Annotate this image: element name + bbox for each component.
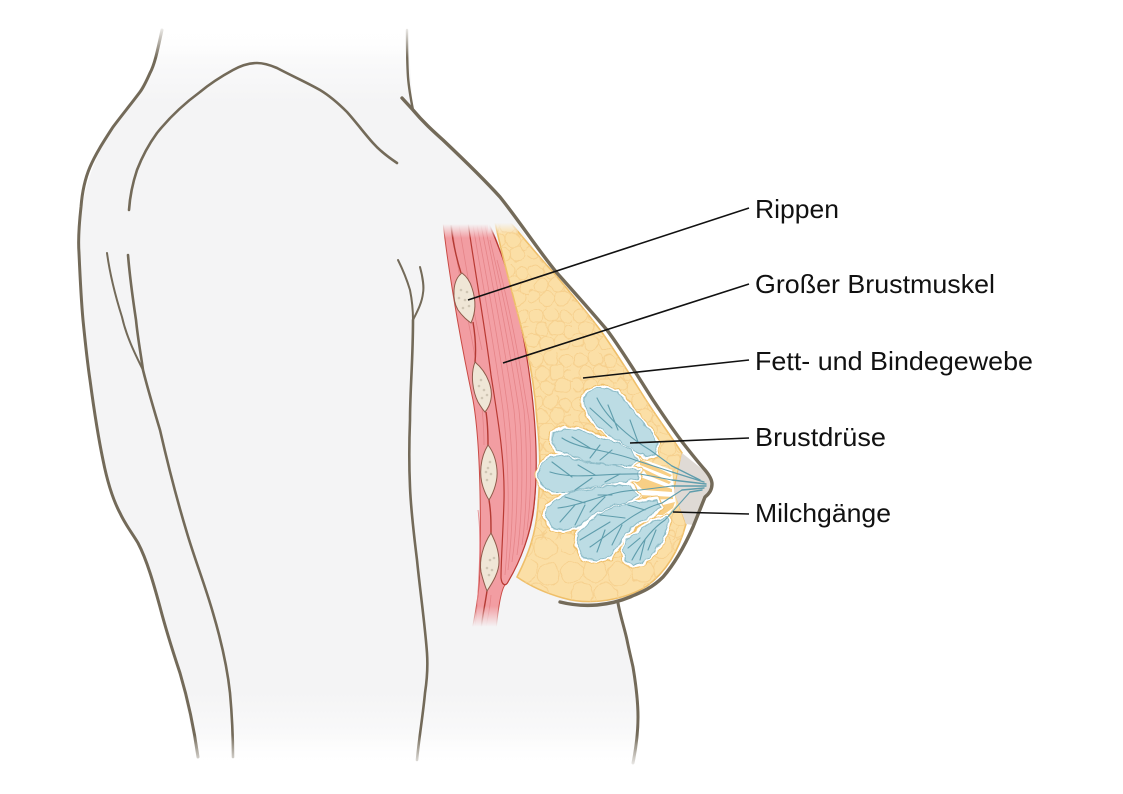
inner arm outline	[128, 255, 233, 757]
top fade	[60, 24, 480, 58]
pectoralis major muscle	[468, 222, 536, 585]
abdomen outline	[618, 603, 638, 763]
mammary gland lobes	[538, 387, 706, 565]
torso front line	[409, 320, 427, 760]
chest wall: ribs and muscles	[438, 218, 536, 632]
neck line	[407, 30, 413, 110]
rib 4	[480, 533, 499, 591]
shoulder curve	[129, 63, 397, 210]
armpit fold back	[413, 267, 423, 320]
white gap between ducts	[632, 455, 676, 525]
label: Brustdrüse: Brustdrüse	[755, 422, 886, 452]
bottom fade	[150, 735, 670, 770]
label: Großer Brustmuskel: Großer Brustmuskel	[755, 269, 995, 299]
chest and breast outline	[402, 98, 712, 605]
label: Fett- und Bindegewebe: Fett- und Bindegewebe	[755, 346, 1033, 376]
duct branches	[550, 398, 690, 560]
rib 2	[472, 362, 491, 412]
body outlines	[79, 30, 712, 763]
fat and connective tissue	[488, 218, 700, 610]
areola	[674, 453, 712, 525]
milk-duct fat strips	[632, 459, 675, 515]
armpit fold front	[398, 260, 413, 320]
back and outer arm outline	[79, 30, 198, 757]
rib 3	[481, 445, 497, 500]
arm fold line	[107, 253, 143, 370]
label: Milchgänge: Milchgänge	[755, 498, 891, 528]
label: Rippen: Rippen	[755, 194, 839, 224]
body silhouette	[79, 20, 690, 770]
rib 1	[454, 273, 475, 323]
intercostal muscle strip	[443, 222, 536, 630]
leader lines	[468, 208, 749, 514]
